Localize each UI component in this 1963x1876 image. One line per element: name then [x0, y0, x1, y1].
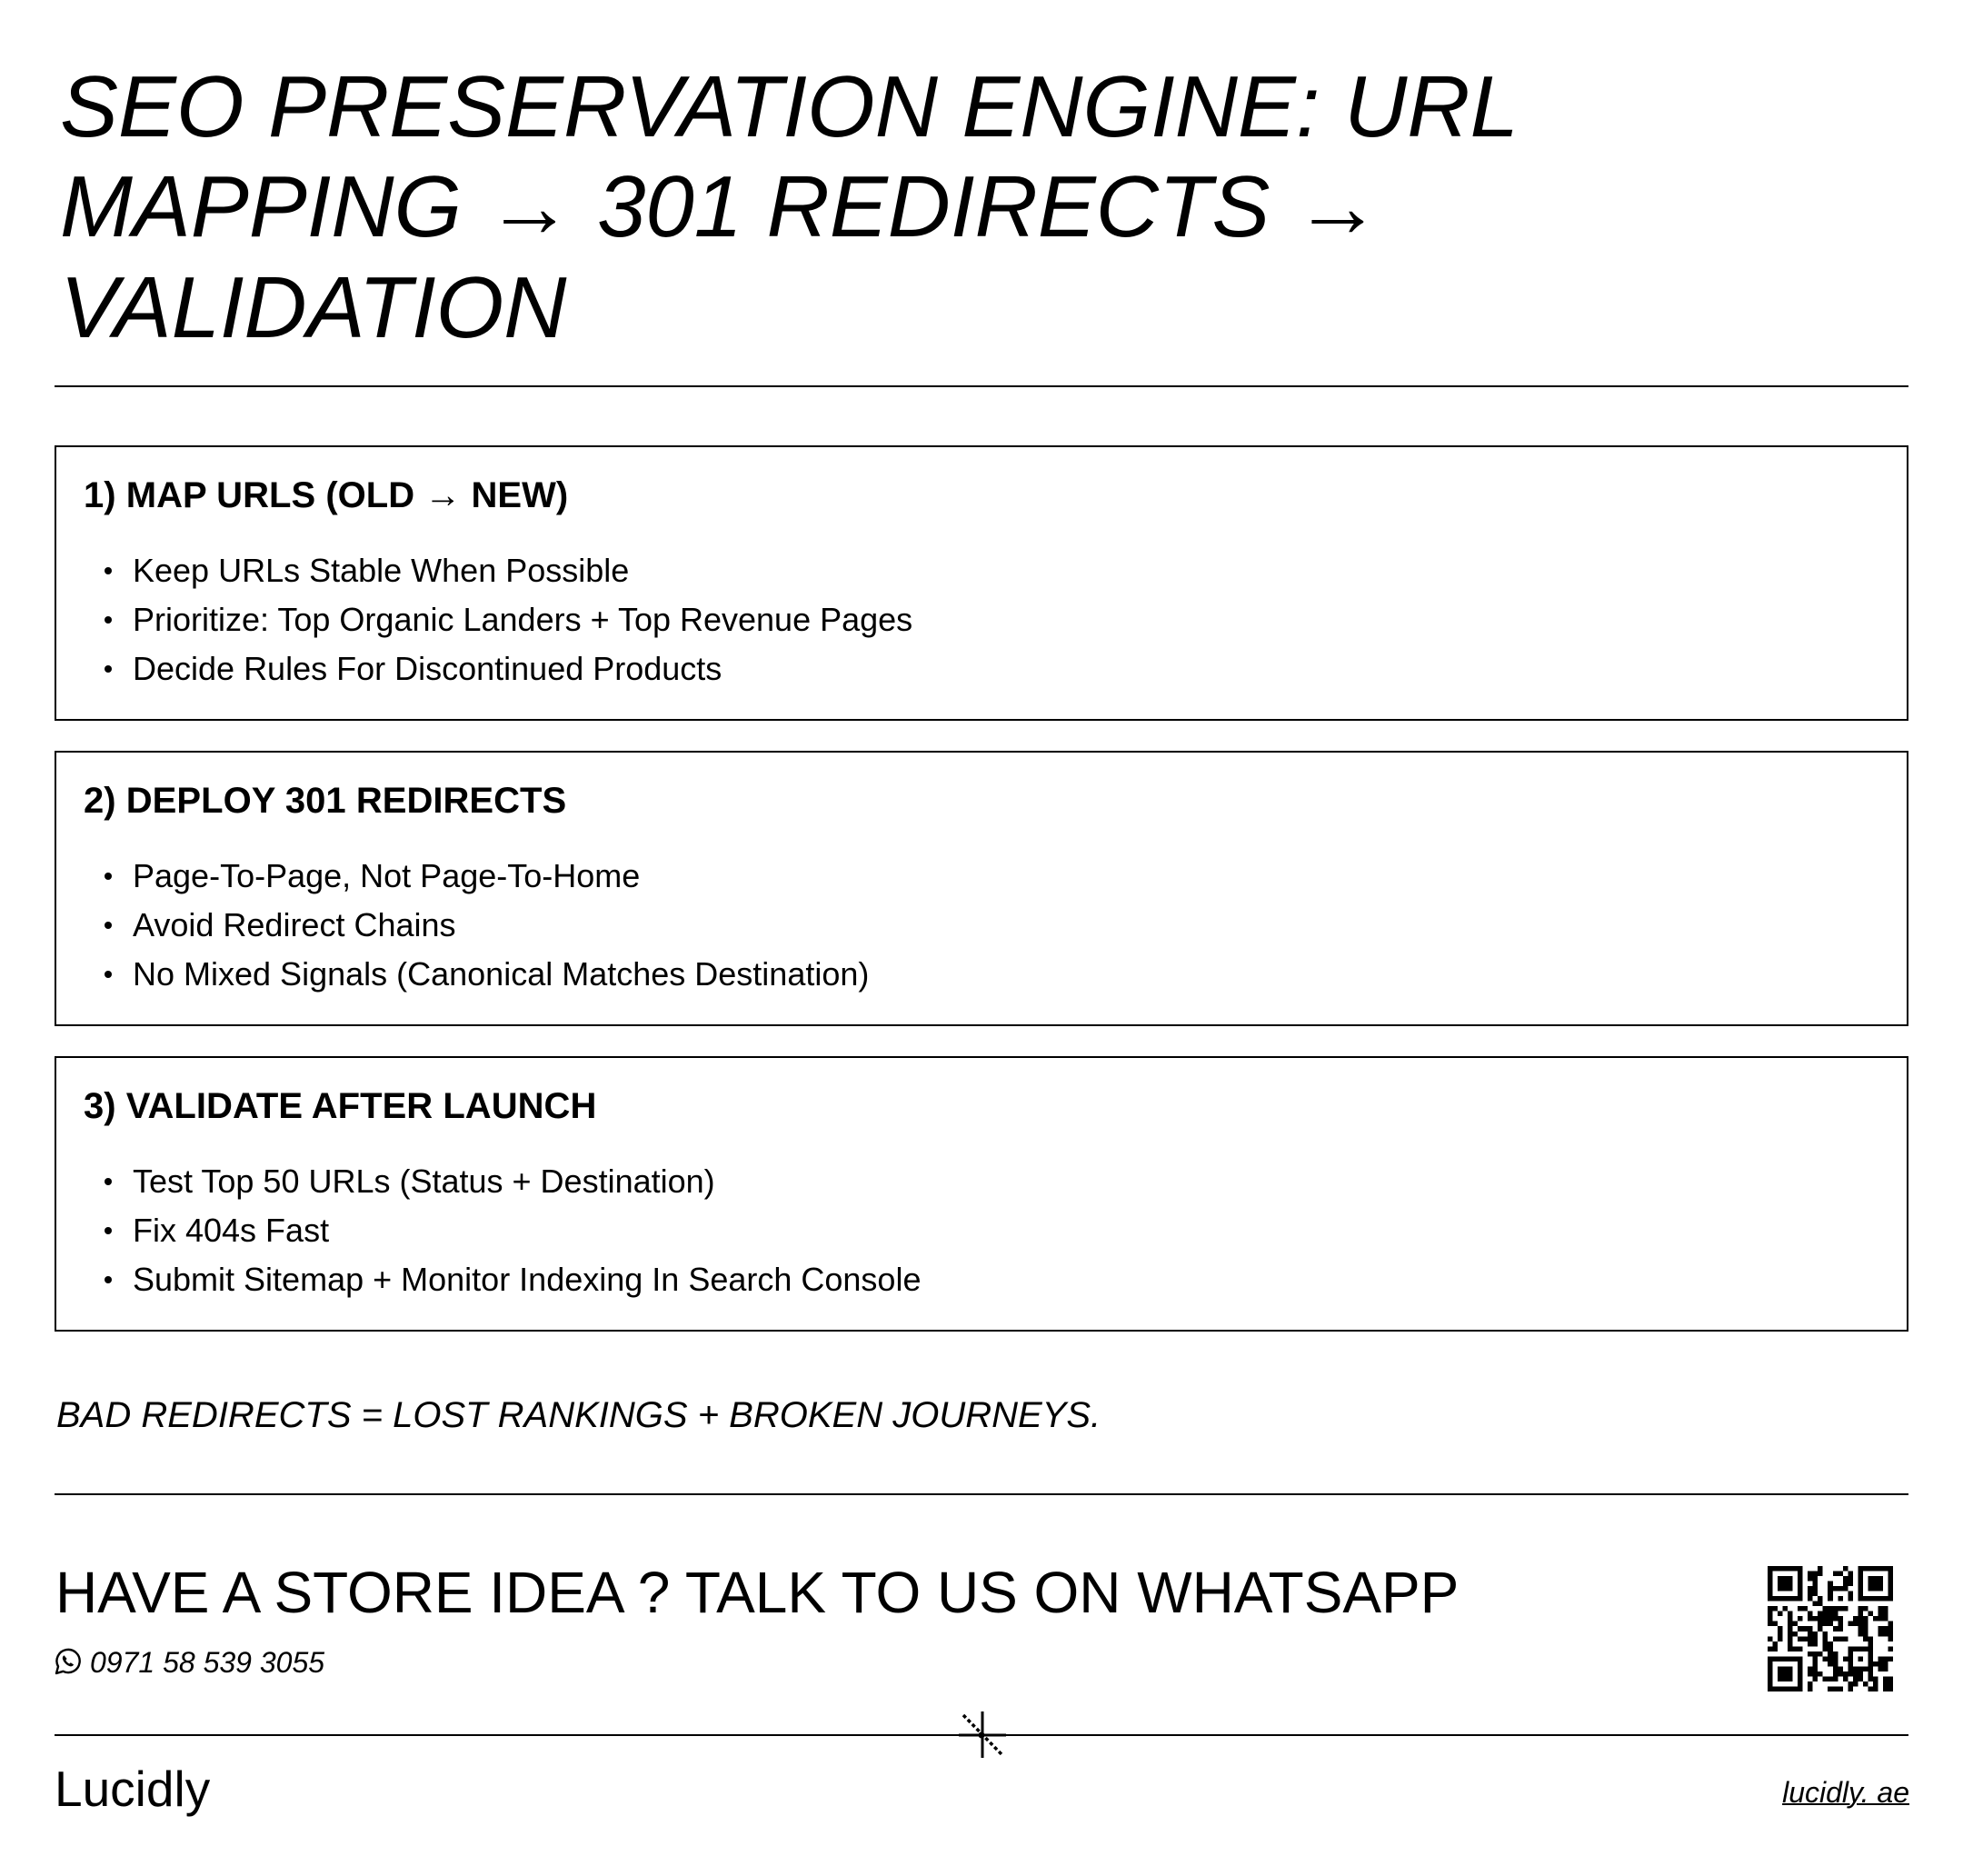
panel: map urls — [55, 445, 1908, 721]
website link: lucidly. ae — [1782, 1776, 1909, 1809]
title — [60, 58, 1519, 356]
panel: validate after launch — [55, 1056, 1908, 1332]
bullet item: Fix 404s Fast — [133, 1212, 329, 1249]
bullet item: Keep URLs Stable When Possible — [133, 552, 629, 589]
panel heading: step 2: 2) DEPLOY 301 REDIRECTS — [84, 781, 566, 821]
warning statement: BAD REDIRECTS = LOST RANKINGS + BROKEN JOURNEYS. — [56, 1395, 1101, 1435]
bullet item: Test Top 50 URLs (Status + Destination) — [133, 1163, 715, 1200]
panel heading: step 1: 1) MAP URLS (OLD → NEW) — [84, 475, 568, 515]
panel: deploy 301 redirects — [55, 751, 1908, 1026]
bullet item: Prioritize: Top Organic Landers + Top Revenue Pages — [133, 601, 912, 638]
icon: whatsapp — [55, 1649, 81, 1674]
call to action heading: HAVE A STORE IDEA ? TALK TO US ON WHATSAPP — [55, 1560, 1459, 1625]
title: SEO PRESERVATION ENGINE: URL — [60, 58, 1519, 155]
bullet item: No Mixed Signals (Canonical Matches Destination) — [133, 955, 869, 993]
bullet item: Page-To-Page, Not Page-To-Home — [133, 857, 640, 894]
bullet item: Submit Sitemap + Monitor Indexing In Search Console — [133, 1261, 921, 1298]
panel heading: step 3: 3) VALIDATE AFTER LAUNCH — [84, 1086, 596, 1126]
bullet item: Avoid Redirect Chains — [133, 906, 456, 943]
title: MAPPING → 301 REDIRECTS → — [60, 158, 1381, 255]
bullet item: Decide Rules For Discontinued Products — [133, 650, 722, 687]
qr code — [1768, 1566, 1893, 1691]
icon: asterisk mark — [959, 1711, 1006, 1758]
title: VALIDATION — [60, 259, 566, 356]
phone number: 0971 58 539 3055 — [90, 1646, 324, 1679]
logo: Lucidly: Lucidly — [55, 1761, 210, 1817]
